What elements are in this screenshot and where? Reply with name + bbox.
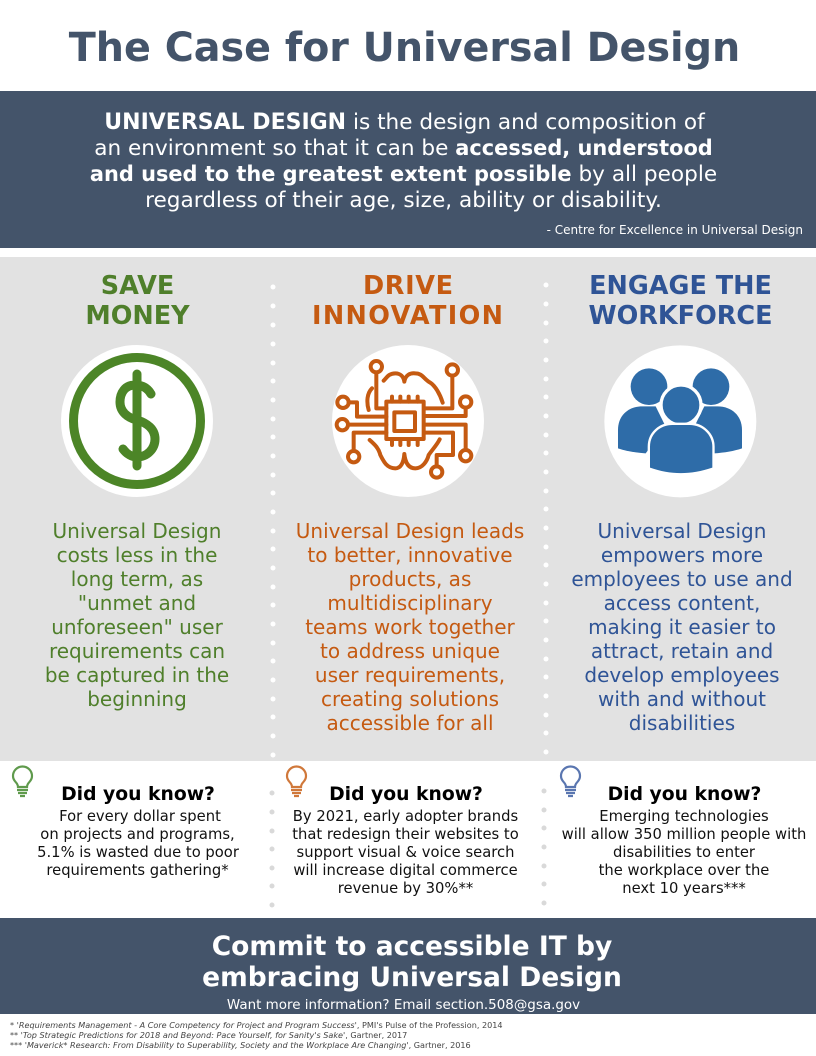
text: workforce fact: the workplace over the bbox=[599, 862, 769, 879]
text: workforce fact: Emerging technologies bbox=[599, 808, 769, 825]
panel: did you know, workforce bbox=[561, 766, 806, 897]
definition text: regardless of their age, size, ability or disability. bbox=[145, 188, 662, 213]
text: innovation fact: By 2021, early adopter brands bbox=[293, 808, 518, 825]
title: The Case for Universal Design bbox=[69, 25, 740, 71]
icon: blue light bulb bbox=[561, 766, 580, 796]
text: drive innovation description: multidisciplinary bbox=[327, 591, 493, 615]
text: drive innovation description: to better, innovative bbox=[307, 543, 513, 567]
panel: did you know, cost bbox=[13, 766, 240, 879]
text: save money description: be captured in the bbox=[45, 663, 229, 687]
text: cost fact: 5.1% is wasted due to poor bbox=[37, 844, 240, 861]
footnotes: * 'Requirements Management - A Core Competency for Project and Program Success', PMI's Pulse of the Profession, 2014 bbox=[10, 1020, 503, 1030]
text: workforce fact: disabilities to enter bbox=[613, 844, 756, 861]
text: drive innovation description: user requirements, bbox=[315, 663, 505, 687]
heading: did you know: Did you know? bbox=[608, 784, 761, 805]
text: save money description: beginning bbox=[87, 687, 187, 711]
text: innovation fact: will increase digital commerce bbox=[293, 862, 518, 879]
text: cost fact bbox=[37, 808, 240, 879]
text: cost fact: For every dollar spent bbox=[59, 808, 221, 825]
text: engage the workforce description: empowers more bbox=[601, 543, 763, 567]
icon: group of people bbox=[604, 345, 756, 497]
text: drive innovation description bbox=[296, 519, 524, 735]
footnotes bbox=[10, 1020, 503, 1050]
contact line: Want more information? Email section.508@gsa.gov bbox=[227, 998, 580, 1013]
text: drive innovation description: teams work together bbox=[305, 615, 516, 639]
text: save money description: costs less in the bbox=[57, 543, 217, 567]
definition text bbox=[90, 110, 717, 213]
definition text: UNIVERSAL DESIGN is the design and composition of bbox=[104, 110, 706, 135]
panel: engage the workforce: WORKFORCE bbox=[588, 301, 773, 331]
text: workforce fact: next 10 years*** bbox=[622, 880, 746, 897]
text: engage the workforce description bbox=[571, 519, 793, 735]
text: drive innovation description: products, as bbox=[349, 567, 471, 591]
text: engage the workforce description: making it easier to bbox=[588, 615, 776, 639]
column dividers bbox=[270, 282, 548, 758]
text: save money description: Universal Design bbox=[53, 519, 221, 543]
footnotes: *** 'Maverick* Research: From Disability to Superability, Society and the Workplace Are Changing', Gartner, 2016 bbox=[10, 1040, 471, 1050]
heading: drive innovation: DRIVE bbox=[363, 271, 453, 301]
icon: chip and brain bbox=[332, 345, 484, 497]
text: engage the workforce description: employees to use and bbox=[571, 567, 793, 591]
heading: engage the workforce: ENGAGE THE bbox=[589, 271, 772, 301]
definition text: an environment so that it can be accessed, understood bbox=[94, 136, 713, 161]
icon: dollar coin bbox=[61, 345, 213, 497]
text: save money description bbox=[45, 519, 229, 711]
icon: green light bulb bbox=[13, 766, 32, 796]
heading: call to action: Commit to accessible IT by bbox=[212, 931, 612, 962]
text: engage the workforce description: develop employees bbox=[584, 663, 780, 687]
did you know dividers bbox=[270, 788, 546, 908]
text: drive innovation description: to address unique bbox=[320, 639, 500, 663]
attribution: - Centre for Excellence in Universal Design bbox=[547, 223, 803, 237]
icon: orange light bulb bbox=[287, 767, 306, 796]
text: engage the workforce description: disabilities bbox=[629, 711, 735, 735]
text: engage the workforce description: attract, retain and bbox=[591, 639, 773, 663]
heading: save money: SAVE bbox=[101, 271, 174, 301]
text: drive innovation description: accessible for all bbox=[326, 711, 494, 735]
panel: drive innovation: INNOVATION bbox=[312, 301, 503, 331]
text: save money description: requirements can bbox=[49, 639, 225, 663]
panel: save money bbox=[45, 271, 229, 711]
panel: engage the workforce bbox=[571, 271, 793, 735]
panel: did you know, innovation bbox=[287, 767, 519, 897]
panel: call to action bbox=[0, 918, 816, 1014]
panel: three benefits background bbox=[0, 257, 816, 761]
text: innovation fact: revenue by 30%** bbox=[338, 880, 473, 897]
text: save money description: long term, as bbox=[71, 567, 203, 591]
text: workforce fact bbox=[562, 808, 806, 897]
heading: did you know: Did you know? bbox=[61, 784, 215, 805]
text: engage the workforce description: Universal Design bbox=[598, 519, 766, 543]
definition text: and used to the greatest extent possible by all people bbox=[90, 162, 717, 187]
heading: did you know: Did you know? bbox=[329, 784, 483, 805]
panel: drive innovation bbox=[296, 271, 524, 735]
text: innovation fact: that redesign their websites to bbox=[292, 826, 519, 843]
text: cost fact: requirements gathering* bbox=[46, 862, 229, 879]
text: engage the workforce description: access content, bbox=[604, 591, 760, 615]
text: drive innovation description: Universal Design leads bbox=[296, 519, 524, 543]
panel: definition banner bbox=[0, 91, 816, 248]
text: engage the workforce description: with and without bbox=[598, 687, 766, 711]
panel: save money: MONEY bbox=[85, 301, 190, 331]
text: innovation fact: support visual & voice search bbox=[297, 844, 514, 861]
text: cost fact: on projects and programs, bbox=[40, 826, 235, 843]
text: innovation fact bbox=[292, 808, 519, 897]
text: save money description: "unmet and bbox=[78, 591, 196, 615]
panel: call to action: embracing Universal Design bbox=[202, 962, 622, 993]
text: drive innovation description: creating solutions bbox=[321, 687, 499, 711]
footnotes: ** 'Top Strategic Predictions for 2018 and Beyond: Pace Yourself, for Sanity's Sake', Gartner, 2017 bbox=[10, 1030, 407, 1040]
text: workforce fact: will allow 350 million people with bbox=[562, 826, 806, 843]
text: save money description: unforeseen" user bbox=[51, 615, 224, 639]
